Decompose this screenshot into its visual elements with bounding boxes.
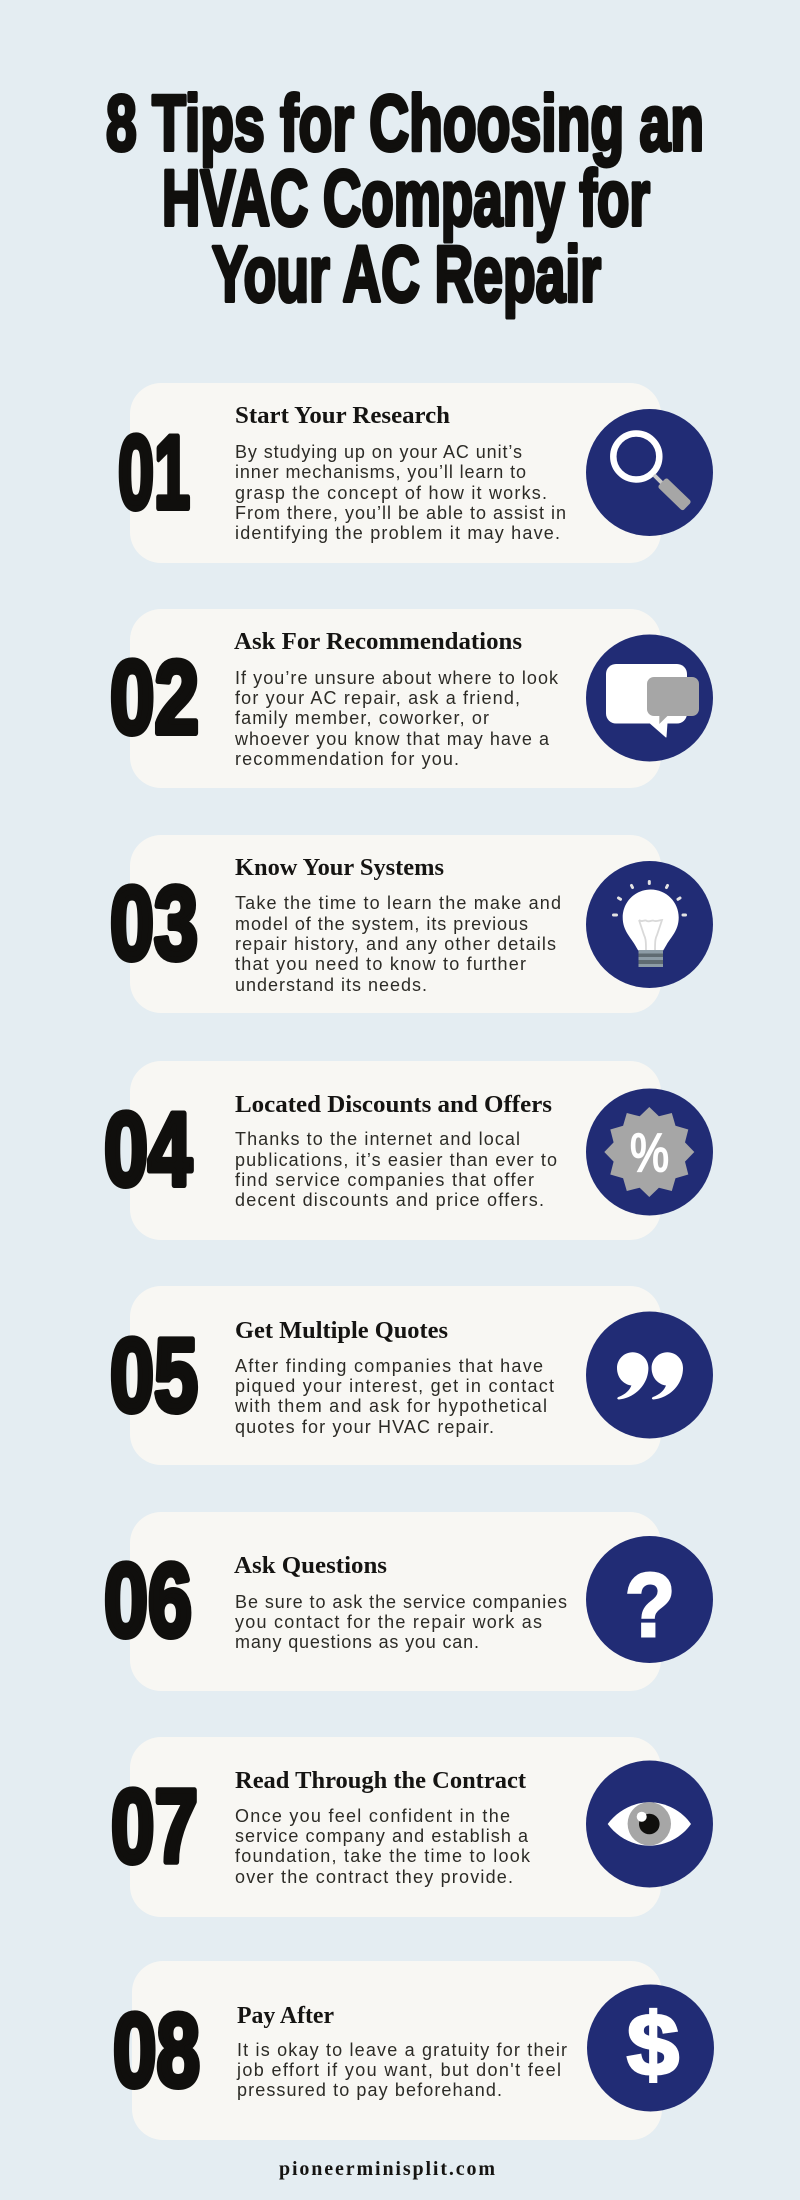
body text: with them and ask for hypothetical <box>234 1396 547 1416</box>
body text: By studying up on your AC unit’s <box>235 442 522 462</box>
card background <box>132 1961 662 2140</box>
card background <box>130 1737 661 1917</box>
body text: foundation, take the time to look <box>235 1846 531 1866</box>
number 04: 04 <box>104 1092 192 1208</box>
body text: find service companies that offer <box>235 1170 534 1190</box>
body text: Take the time to learn the make and <box>235 893 561 913</box>
panel: tip 05 <box>110 1286 713 1465</box>
body text: piqued your interest, get in contact <box>235 1376 554 1396</box>
footer website: pioneerminisplit.com <box>279 2158 495 2180</box>
panel: tip 08 <box>113 1961 714 2140</box>
panel: tip 04 <box>104 1061 713 1240</box>
icon: speech bubbles <box>586 634 713 762</box>
heading: Pay After <box>237 2003 334 2029</box>
icon: eye <box>586 1760 713 1888</box>
icon: question mark: ? <box>625 1556 675 1656</box>
icon: light bulb <box>586 861 713 988</box>
body text: It is okay to leave a gratuity for their <box>237 2040 567 2060</box>
heading: Start Your Research <box>235 403 450 429</box>
icon: dollar sign: $ <box>627 1995 679 2094</box>
body text <box>234 1356 554 1437</box>
body text: pressured to pay beforehand. <box>237 2080 502 2100</box>
body text: Thanks to the internet and local <box>235 1129 520 1149</box>
number 03: 03 <box>110 866 198 982</box>
body text <box>235 1129 557 1210</box>
heading: Get Multiple Quotes <box>235 1318 448 1344</box>
body text: grasp the concept of how it works. <box>235 483 547 503</box>
number 02: 02 <box>110 640 199 756</box>
title <box>106 78 704 318</box>
number 05: 05 <box>110 1318 198 1434</box>
body text: From there, you’ll be able to assist in <box>235 503 566 523</box>
number 08: 08 <box>113 1993 200 2109</box>
body text: many questions as you can. <box>235 1632 479 1652</box>
number 06: 06 <box>104 1543 192 1659</box>
body text: identifying the problem it may have. <box>235 523 560 543</box>
heading: Located Discounts and Offers <box>235 1092 552 1118</box>
body text: quotes for your HVAC repair. <box>235 1417 494 1437</box>
body text: family member, coworker, or <box>235 708 489 728</box>
panel: tip 06 <box>104 1512 713 1691</box>
body text: After finding companies that have <box>235 1356 543 1376</box>
panel: tip 03 <box>110 835 713 1013</box>
body text: that you need to know to further <box>235 954 526 974</box>
body text: Be sure to ask the service companies <box>235 1592 567 1612</box>
body text: you contact for the repair work as <box>235 1612 542 1632</box>
body text: If you’re unsure about where to look <box>235 668 559 688</box>
body text <box>235 442 566 543</box>
card background <box>130 383 661 563</box>
body text <box>235 1806 531 1887</box>
title: Your AC Repair <box>212 229 601 318</box>
body text: understand its needs. <box>235 975 427 995</box>
panel: tip 02 <box>110 609 713 788</box>
icon: quotation marks <box>586 1312 713 1438</box>
icon: discount badge: % <box>630 1123 669 1183</box>
body text: decent discounts and price offers. <box>235 1190 544 1210</box>
body text <box>235 1592 567 1652</box>
number 01: 01 <box>118 415 190 531</box>
icon: dollar sign <box>587 1984 714 2112</box>
body text: model of the system, its previous <box>235 914 528 934</box>
heading: Read Through the Contract <box>235 1768 526 1794</box>
heading: Ask Questions <box>234 1553 387 1579</box>
card background <box>130 1286 661 1465</box>
body text: inner mechanisms, you’ll learn to <box>235 462 526 482</box>
body text: over the contract they provide. <box>235 1867 513 1887</box>
number 07: 07 <box>111 1769 198 1885</box>
body text: for your AC repair, ask a friend, <box>235 688 520 708</box>
body text: repair history, and any other details <box>235 934 556 954</box>
body text: Once you feel confident in the <box>235 1806 510 1826</box>
card background <box>130 609 661 788</box>
panel: tip 01 <box>118 383 713 563</box>
panel: tip 07 <box>111 1737 713 1917</box>
body text <box>235 893 561 995</box>
card background <box>130 1061 661 1240</box>
heading: Know Your Systems <box>235 855 444 881</box>
heading: Ask For Recommendations <box>234 629 522 655</box>
card background <box>130 1512 661 1691</box>
body text: publications, it’s easier than ever to <box>235 1150 557 1170</box>
body text: recommendation for you. <box>235 749 459 769</box>
icon: question mark <box>586 1536 713 1663</box>
body text: whoever you know that may have a <box>234 729 550 749</box>
body text: job effort if you want, but don't feel <box>236 2060 561 2080</box>
icon: discount badge <box>586 1088 713 1216</box>
icon: magnifying glass <box>586 409 713 536</box>
body text <box>236 2040 567 2100</box>
card background <box>130 835 661 1013</box>
body text: service company and establish a <box>235 1826 529 1846</box>
body text <box>234 668 559 769</box>
